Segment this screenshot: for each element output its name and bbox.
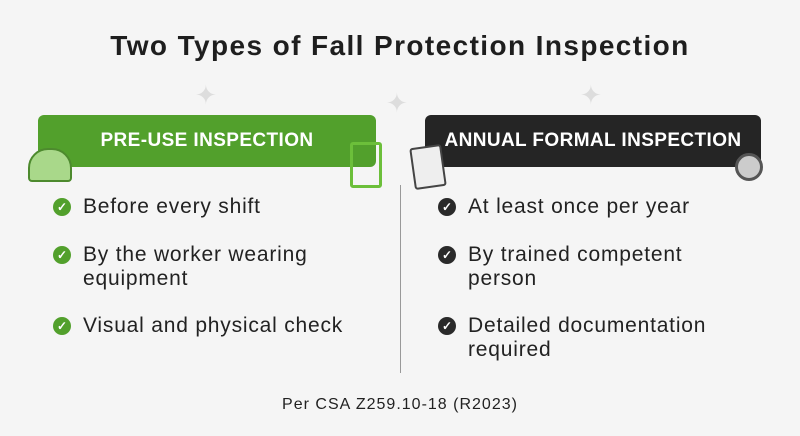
icon: hard hat [28,148,72,182]
header: annual: ANNUAL FORMAL INSPECTION [444,130,742,151]
list: annual [438,195,706,361]
item: By trained competent person [468,243,682,290]
item: Detailed documentation required [468,314,706,361]
icon: magnifier [735,153,763,181]
icon: maple leaves [195,80,602,118]
list: pre-use [53,195,343,337]
icon: maple leaves: ✦ [580,80,602,110]
header: pre-use: PRE-USE INSPECTION [100,130,314,151]
divider [400,185,401,373]
item: ✓ [57,248,67,262]
item: By the worker wearing equipment [83,243,308,290]
footer: Per CSA Z259.10-18 (R2023) [282,396,518,413]
item: Visual and physical check [83,314,343,337]
item: ✓ [442,200,452,214]
item: ✓ [57,319,67,333]
item: ✓ [57,200,67,214]
icon: maple leaves: ✦ [386,88,408,118]
icon: harness [350,142,382,188]
item: ✓ [442,319,452,333]
icon: maple leaves: ✦ [195,80,217,110]
icon: clipboard [409,144,447,190]
item: ✓ [442,248,452,262]
item: At least once per year [468,195,690,218]
header: annual [425,115,761,167]
header: pre-use [38,115,376,167]
title: Two Types of Fall Protection Inspection [110,30,690,61]
item: Before every shift [83,195,261,218]
